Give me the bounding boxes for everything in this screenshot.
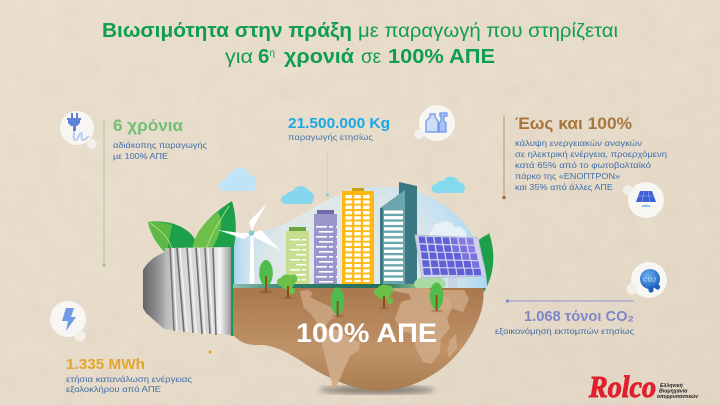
stat description: κάλυψη ενεργειακών αναγκών [515, 138, 642, 148]
stat description: και 35% από άλλες ΑΠΕ [515, 182, 613, 192]
stat description: σε ηλεκτρική ενέργεια, προερχόμενη [515, 149, 667, 159]
stat heading: 6 χρόνια [113, 117, 183, 135]
clouds [219, 168, 465, 204]
stat description: ετήσια κατανάλωση ενέργειας [66, 374, 192, 384]
title [102, 19, 618, 68]
green building [286, 227, 309, 285]
logo: Rolco: απορρυπαντικών [657, 394, 698, 400]
stat heading: 21.500.000 Kg [288, 115, 390, 132]
purple building [314, 210, 337, 285]
callout: annual production [288, 105, 455, 196]
screw threads [170, 248, 216, 335]
glass cloud reflection [427, 221, 466, 245]
title: 6 [258, 45, 269, 68]
title: Βιωσιμότητα στην πράξη [102, 19, 352, 42]
earth [233, 288, 484, 391]
100% label: 100% ΑΠΕ [296, 318, 437, 348]
icon: lightning bolt [50, 301, 86, 342]
lightbulb illustration [143, 168, 493, 394]
stat description: αδιάκοπης παραγωγής [113, 140, 207, 150]
callout: 6 years [60, 111, 207, 266]
ground shadow [319, 386, 435, 394]
callout: CO2 savings [495, 262, 667, 336]
title: με παραγωγή που στηρίζεται [358, 21, 618, 42]
left glass reflection [233, 238, 251, 288]
callout: up to 100% [502, 114, 667, 218]
wind turbine [218, 203, 280, 288]
logo: Rolco: Ελληνική [660, 383, 683, 389]
green ground strip [233, 284, 433, 289]
title: χρονιά [284, 45, 354, 68]
title: για [225, 47, 253, 68]
icon: solar panel [623, 182, 664, 218]
stat description: παραγωγής ετησίως [288, 132, 373, 142]
stat description [113, 140, 207, 161]
stat description: πάρκο της «ΕΝΟΠΤΡΟΝ» [515, 171, 620, 181]
right leaf [475, 233, 493, 292]
soft green bush [414, 276, 446, 292]
stat heading: 1.335 MWh [66, 356, 145, 373]
stat heading: 1.068 τόνοι CO₂ [524, 308, 634, 325]
logo: Rolco: Βιομηχανία [659, 388, 688, 394]
stat description: εξολοκλήρου από ΑΠΕ [66, 384, 161, 394]
stat description: κατά 65% από το φωτοβολταϊκό [515, 160, 651, 170]
icon: detergent bottles [414, 105, 455, 141]
callout: annual consumption [50, 301, 212, 394]
stat description: εξοικονόμηση εκπομπών ετησίως [495, 326, 634, 336]
stat heading: Έως και 100% [515, 114, 632, 133]
icon: CO2 bubbles [626, 262, 667, 298]
stat description [66, 374, 192, 394]
yellow building [342, 188, 374, 285]
green collar strip [231, 245, 234, 336]
icon: CO2 bubbles: CO2 [643, 278, 656, 284]
glass globe [233, 187, 487, 288]
screw neck [165, 247, 232, 335]
teal tower [380, 182, 417, 285]
title: η [269, 48, 275, 59]
logo: Rolco [588, 369, 698, 404]
title: 100% ΑΠΕ [388, 45, 495, 68]
screw cap [143, 251, 168, 330]
stat description [515, 138, 667, 192]
continents [300, 288, 469, 390]
title: σε [361, 47, 382, 68]
solar panel [415, 235, 486, 278]
trees [259, 260, 443, 317]
leaves [148, 201, 236, 252]
stat description: με 100% ΑΠΕ [113, 151, 168, 161]
icon: plug [60, 111, 97, 149]
solar panel stand [448, 275, 457, 288]
logo: Rolco: Rolco [588, 369, 656, 404]
